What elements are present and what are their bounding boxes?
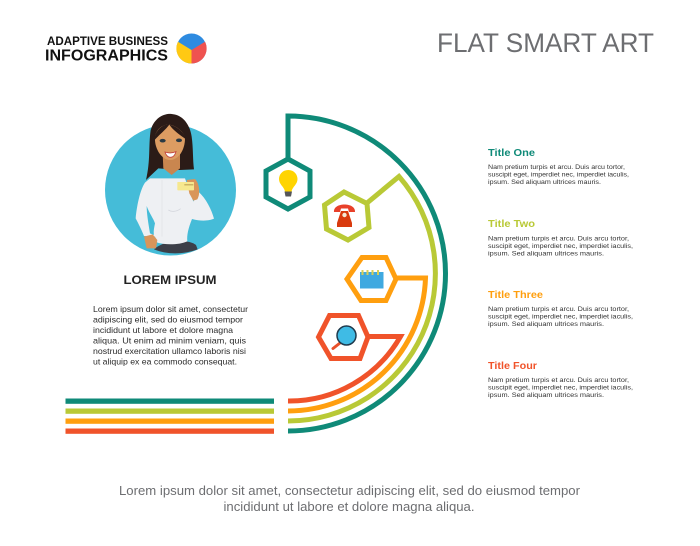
logo text: INFOGRAPHICS bbox=[45, 48, 168, 64]
olive arc connector bbox=[288, 176, 435, 421]
icon: light bulb bbox=[279, 170, 298, 196]
orange arc connector bbox=[288, 278, 426, 411]
icon: magnifier bbox=[333, 326, 356, 348]
left paragraph: ut aliquip ex ea commodo consequat. bbox=[93, 356, 237, 366]
left paragraph: Lorem ipsum dolor sit amet, consectetur bbox=[93, 304, 248, 314]
footer text: incididunt ut labore et dolore magna aliqua. bbox=[224, 500, 474, 514]
left paragraph: aliqua. Ut enim ad minim veniam, quis bbox=[93, 336, 246, 346]
item: title one: suscipit eget, imperdiet nec, imperdiet iaculis, bbox=[488, 172, 629, 178]
item: title one: ipsum. Sed aliquam ultrices mauris. bbox=[488, 179, 601, 186]
item: title one: Title One bbox=[488, 148, 535, 159]
teal arc connector bbox=[288, 116, 445, 431]
item: title one bbox=[488, 148, 629, 186]
heading: lorem ipsum: LOREM IPSUM bbox=[124, 273, 216, 287]
horizontal bars bbox=[66, 398, 274, 434]
left paragraph bbox=[93, 304, 248, 366]
hexagon: red bbox=[318, 316, 368, 358]
item: title three: suscipit eget, imperdiet nec, imperdiet iaculis, bbox=[488, 314, 633, 320]
item: title four bbox=[488, 361, 633, 399]
icon: telephone bbox=[334, 204, 355, 227]
figure body bbox=[136, 178, 214, 253]
hexagon: olive bbox=[324, 192, 369, 240]
logo block bbox=[45, 34, 207, 64]
red arc connector bbox=[288, 336, 400, 401]
left paragraph: nostrud exercitation ullamco laboris nisi bbox=[93, 346, 246, 356]
item: title two bbox=[488, 219, 633, 258]
item: title two: ipsum. Sed aliquam ultrices mauris. bbox=[488, 250, 604, 258]
logo text bbox=[45, 36, 168, 64]
item: title three bbox=[488, 290, 633, 328]
left paragraph: incididunt ut labore et dolore magna bbox=[93, 325, 233, 335]
icon: calendar bbox=[360, 270, 384, 288]
logo icon: pie bbox=[176, 34, 207, 64]
footer text bbox=[119, 484, 580, 514]
footer text: Lorem ipsum dolor sit amet, consectetur adipiscing elit, sed do eiusmod tempor bbox=[119, 484, 580, 498]
item: title four: Nam pretium turpis et arcu. Duis arcu tortor, bbox=[488, 377, 629, 384]
main title: FLAT SMART ART bbox=[437, 28, 654, 58]
portrait background circle bbox=[105, 124, 236, 256]
item: title three: Title Three bbox=[488, 290, 543, 301]
item: title two: Title Two bbox=[488, 219, 535, 230]
hexagon: orange bbox=[347, 258, 396, 300]
item: title four: ipsum. Sed aliquam ultrices mauris. bbox=[488, 392, 604, 399]
item: title three: Nam pretium turpis et arcu. Duis arcu tortor, bbox=[488, 306, 629, 313]
left paragraph: adipiscing elit, sed do eiusmod tempor bbox=[93, 314, 243, 324]
item: title two: Nam pretium turpis et arcu. Duis arcu tortor, bbox=[488, 236, 629, 242]
hexagon: teal bbox=[266, 159, 310, 209]
logo text: ADAPTIVE BUSINESS bbox=[47, 36, 168, 48]
item: title one: Nam pretium turpis et arcu. Duis arcu tortor, bbox=[488, 164, 625, 171]
figure head and hair bbox=[146, 114, 194, 180]
portrait: woman with business card bbox=[105, 114, 236, 255]
item: title three: ipsum. Sed aliquam ultrices mauris. bbox=[488, 321, 604, 328]
item: title four: suscipit eget, imperdiet nec, imperdiet iaculis, bbox=[488, 384, 633, 392]
item: title four: Title Four bbox=[488, 361, 537, 372]
item: title two: suscipit eget, imperdiet nec, imperdiet iaculis, bbox=[488, 243, 633, 250]
